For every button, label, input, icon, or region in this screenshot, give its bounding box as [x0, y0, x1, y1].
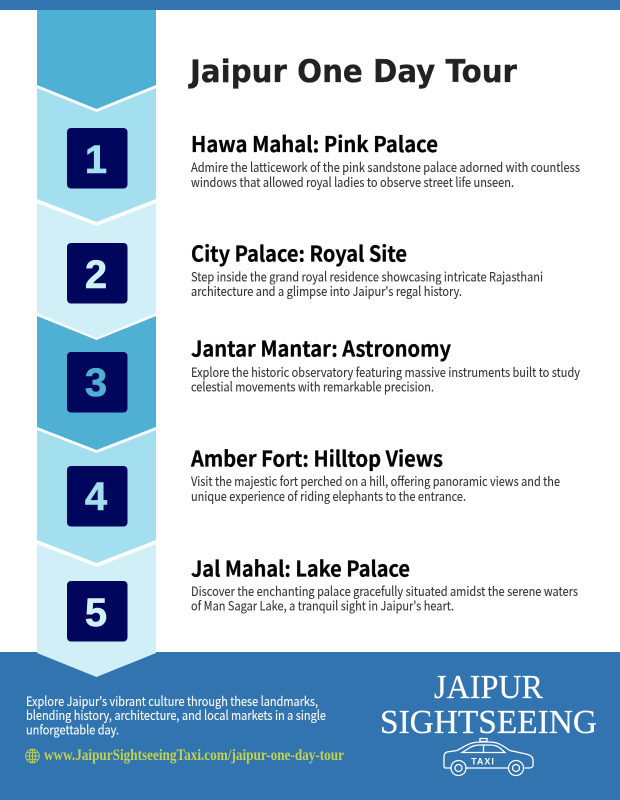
- footer description: Explore Jaipur's vibrant culture through these landmarks,: [26, 691, 318, 710]
- step 3 marker: [37, 316, 156, 450]
- stop 4 text: unique experience of riding elephants to the entrance.: [191, 486, 466, 505]
- stop 2 text: [191, 238, 543, 300]
- stop 3 text: [191, 332, 580, 396]
- stop 1 text: Hawa Mahal: Pink Palace: [191, 128, 438, 159]
- step 1 marker: 1: [85, 138, 107, 182]
- brand name: [380, 669, 597, 741]
- website url: www.JaipurSightseeingTaxi.com/jaipur-one-day-tour: [44, 747, 344, 764]
- stop 5 text: [191, 552, 578, 614]
- footer description: blending history, architecture, and local markets in a single: [26, 705, 326, 724]
- stop 1 text: windows that allowed royal ladies to observe street life unseen.: [191, 172, 514, 191]
- stop 3 text: Jantar Mantar: Astronomy: [191, 332, 452, 364]
- stop 3 text: celestial movements with remarkable precision.: [191, 376, 434, 396]
- chevron: header segment: [37, 10, 156, 109]
- stop 4 text: Amber Fort: Hilltop Views: [190, 442, 443, 474]
- footer description: [26, 691, 326, 738]
- title: Jaipur One Day Tour: [188, 54, 518, 90]
- step 1 marker: [37, 88, 156, 222]
- stop 1 text: [191, 128, 580, 191]
- stop 2 text: Step inside the grand royal residence showcasing intricate Rajasthani: [191, 266, 543, 286]
- stop 2 text: architecture and a glimpse into Jaipur's regal history.: [191, 281, 462, 300]
- brand name: SIGHTSEEING: [380, 704, 597, 741]
- top band: [0, 0, 620, 10]
- step 5 marker: [37, 544, 156, 677]
- footer panel background: [0, 652, 620, 800]
- stop 5 text: Jal Mahal: Lake Palace: [191, 552, 410, 584]
- step 2 marker: [37, 203, 156, 338]
- step 4 marker: [37, 430, 156, 563]
- stop 2 text: City Palace: Royal Site: [191, 238, 407, 268]
- icon: taxi: [444, 738, 533, 776]
- icon: taxi: TAXI: [471, 756, 495, 766]
- icon: globe: [26, 749, 39, 763]
- step 5 marker: 5: [85, 591, 107, 635]
- brand name: JAIPUR: [434, 669, 543, 706]
- step 3 marker: 3: [85, 361, 107, 405]
- footer description: unforgettable day.: [26, 720, 119, 738]
- step 4 marker: 4: [85, 475, 108, 519]
- stop 4 text: [190, 442, 560, 505]
- stop 4 text: Visit the majestic fort perched on a hill, offering panoramic views and the: [191, 471, 560, 490]
- stop 5 text: of Man Sagar Lake, a tranquil sight in Jaipur's heart.: [191, 596, 454, 614]
- step 2 marker: 2: [85, 253, 107, 297]
